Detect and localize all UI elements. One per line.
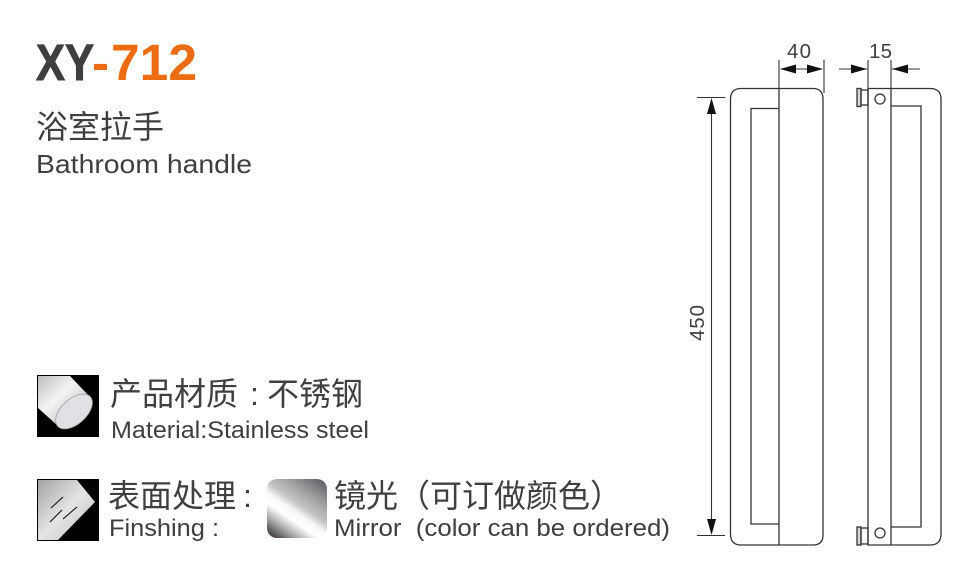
- material label Chinese: 不锈钢: [267, 376, 363, 412]
- material label English: Material:Stainless steel: [111, 417, 369, 444]
- subtitle: English product name: Bathroom handle: [36, 149, 252, 179]
- title: XY-712: 712: [111, 34, 197, 91]
- mirror label Chinese: 镜光（可订做颜色）: [334, 478, 622, 514]
- dimension: 15 width: [839, 40, 920, 88]
- mirror label English: Mirror (color can be ordered): [334, 515, 670, 542]
- drawing: front view of handle: [730, 88, 823, 545]
- icon: surface finish: [37, 479, 99, 541]
- dimension: 15 width: 15: [869, 40, 892, 63]
- title: XY-712: -: [92, 34, 109, 91]
- drawing: side view of handle: [857, 88, 941, 545]
- icon: material cylinder: [37, 375, 99, 437]
- finish label English: Finshing :: [109, 515, 219, 542]
- title: XY-712: XY: [36, 34, 94, 91]
- dimension: 450 height: [686, 98, 725, 536]
- finish label Chinese: 表面处理: [108, 478, 236, 514]
- finish label Chinese: :: [243, 478, 252, 514]
- icon: mirror swatch: [267, 479, 327, 538]
- title: XY-712: [36, 34, 197, 91]
- subtitle: Chinese product name: 浴室拉手: [36, 109, 164, 145]
- dimension: 450 height: 450: [686, 305, 709, 341]
- dimension: 40 width: 40: [787, 40, 811, 63]
- dimension: 40 width: [779, 40, 824, 93]
- material label Chinese: :: [250, 376, 259, 412]
- material label Chinese: 产品材质: [110, 376, 238, 412]
